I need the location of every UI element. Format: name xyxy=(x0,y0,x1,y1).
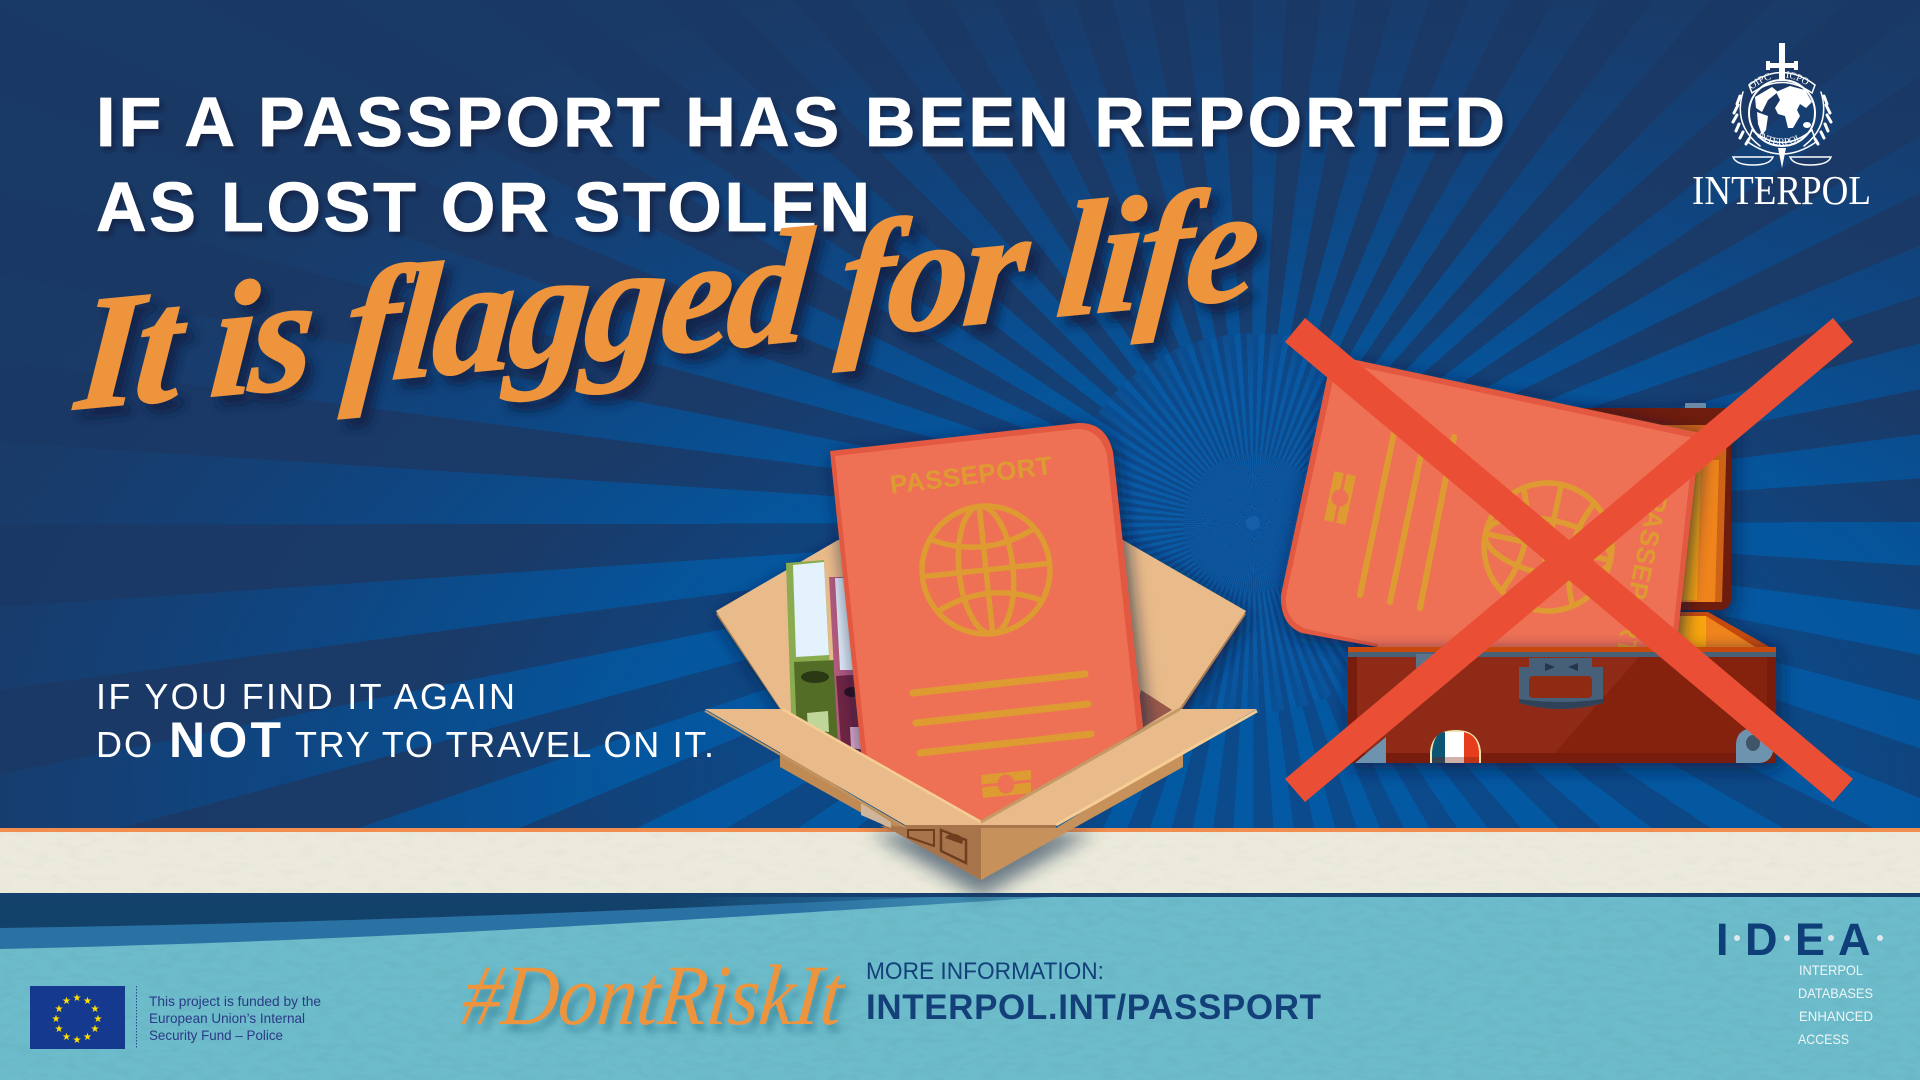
interpol emblem xyxy=(1731,43,1833,168)
passport chip symbol xyxy=(1324,471,1356,525)
EU funding note: This project is funded by the xyxy=(149,993,321,1009)
interpol emblem: ICPO xyxy=(1786,71,1809,84)
box interior shadow xyxy=(1130,690,1172,735)
sub heading: do not travel: DO xyxy=(96,724,152,765)
passport data lines xyxy=(913,674,1091,753)
IDEA logo: DATABASES xyxy=(1798,985,1873,1001)
french flag sticker xyxy=(1430,730,1481,763)
passport label: PASSEPORT xyxy=(1610,492,1673,658)
IDEA logo xyxy=(1716,914,1883,1047)
passport globe emblem xyxy=(916,500,1056,640)
more information link: INTERPOL.INT/PASSPORT xyxy=(866,988,1321,1027)
open cardboard box with passport xyxy=(705,423,1257,897)
EU flag: ★ xyxy=(62,1032,71,1043)
IDEA logo: INTERPOL xyxy=(1799,962,1863,978)
campaign hashtag: #DontRiskIt xyxy=(458,947,850,1043)
EU flag: ★ xyxy=(83,1032,92,1043)
sunburst background xyxy=(0,0,1920,828)
EU flag: ★ xyxy=(73,1035,82,1046)
IDEA logo: D xyxy=(1745,914,1778,965)
main heading: AS LOST OR STOLEN xyxy=(96,168,870,246)
EU flag: ★ xyxy=(55,1024,64,1035)
passport label: PASSEPORT xyxy=(888,450,1054,500)
binders in box xyxy=(786,560,872,760)
more information link: MORE INFORMATION: xyxy=(866,958,1104,985)
IDEA logo: E xyxy=(1795,914,1825,965)
EU flag: ★ xyxy=(73,993,82,1004)
cancelled passport in suitcase xyxy=(1281,355,1700,660)
IDEA logo: I xyxy=(1716,914,1729,965)
EU flag: ★ xyxy=(62,996,71,1007)
EU flag: ★ xyxy=(91,1004,100,1015)
script headline: It is flagged for life xyxy=(69,153,1266,445)
IDEA logo: A xyxy=(1838,914,1870,965)
suitcase base xyxy=(1348,647,1776,763)
EU flag: ★ xyxy=(94,1014,103,1025)
sub heading: do not travel xyxy=(96,676,714,768)
suitcase handle xyxy=(1519,658,1603,709)
sub heading: do not travel: IF YOU FIND IT AGAIN xyxy=(96,676,515,717)
IDEA logo: ACCESS xyxy=(1798,1031,1849,1047)
fragile icons and tape xyxy=(861,803,966,863)
sub heading: do not travel: TRY TO TRAVEL ON IT. xyxy=(295,724,714,765)
main heading: IF A PASSPORT HAS BEEN REPORTED xyxy=(96,83,1505,161)
teal footer panel xyxy=(0,893,1920,1080)
suitcase lid xyxy=(1560,403,1775,650)
front flaps xyxy=(705,709,1257,828)
passport globe emblem xyxy=(1472,471,1624,623)
main heading xyxy=(96,83,1505,246)
interpol emblem: OIPC xyxy=(1749,73,1771,88)
EU flag xyxy=(30,986,136,1049)
red cross over suitcase xyxy=(1285,318,1853,802)
EU flag: ★ xyxy=(55,1004,64,1015)
interpol wordmark: INTERPOL xyxy=(1692,167,1871,213)
INTERPOL logo xyxy=(1692,43,1871,213)
box ground shadow xyxy=(870,832,1095,897)
passport data lines xyxy=(1360,433,1454,608)
box back flaps xyxy=(716,540,1246,826)
EU flag: ★ xyxy=(52,1014,61,1025)
red passport xyxy=(830,423,1143,835)
box body xyxy=(780,750,1183,880)
EU flag: ★ xyxy=(83,996,92,1007)
suitcase with cancelled passport xyxy=(1281,355,1776,763)
EU funding note xyxy=(149,993,321,1043)
passport chip symbol xyxy=(981,770,1031,798)
IDEA logo: ENHANCED xyxy=(1799,1008,1873,1024)
cream shelf band xyxy=(0,828,1920,893)
sub heading: do not travel: NOT xyxy=(169,712,281,768)
more information link xyxy=(866,958,1321,1027)
EU flag: ★ xyxy=(91,1024,100,1035)
EU funding note: Security Fund – Police xyxy=(149,1027,283,1043)
EU funding note: European Union’s Internal xyxy=(149,1010,305,1026)
interpol emblem: INTERPOL xyxy=(1757,131,1802,145)
